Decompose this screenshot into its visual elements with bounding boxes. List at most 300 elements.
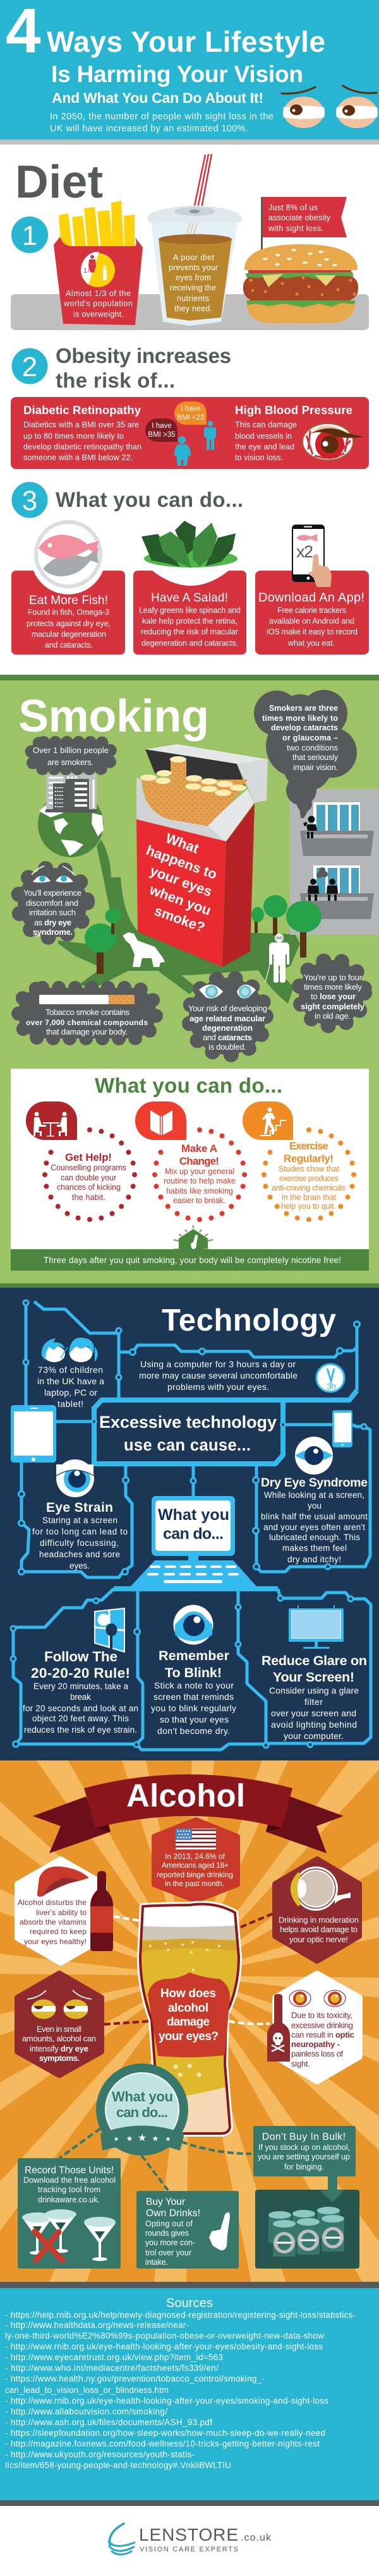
screen	[152, 1496, 235, 1556]
icon: city buildings	[45, 774, 97, 812]
icon: thumbs up hand	[209, 2212, 230, 2250]
banner: Three days after you quit smoking, your body will be completely nicotine free!	[44, 1255, 341, 1265]
hexagon: optic nerve: helps avoid damage to	[280, 1925, 358, 1934]
text: habits like smoking	[166, 1187, 233, 1196]
text	[164, 1143, 236, 1205]
card text: Leafy greens like spinach and	[139, 606, 241, 615]
icon: bloodshot eye	[303, 424, 364, 460]
cigarettes	[140, 756, 248, 827]
hexagon: toxicity: painless loss of	[291, 2049, 343, 2058]
fries	[59, 201, 135, 249]
callout	[253, 2126, 356, 2202]
text: Exercise	[289, 1140, 328, 1152]
tray	[11, 294, 369, 330]
computer use text	[139, 1359, 298, 1392]
icon: grey fish	[43, 547, 99, 576]
20-20-20 rule: for 20 seconds and look at an	[23, 1704, 138, 1713]
card text: Eat More Fish!	[29, 594, 108, 607]
card: record those units: drinkaware.co.uk.	[38, 2195, 100, 2204]
smoke cloud: dry eye: You'll experience	[23, 888, 81, 898]
cup	[151, 221, 238, 326]
source list: - http://www.who.int/mediacentre/factsheets/fs339/en/	[5, 2363, 219, 2373]
heading: obesity	[56, 344, 231, 392]
smoke cloud: lose your sight	[299, 960, 365, 1026]
eye strain: headaches and sore	[39, 1550, 120, 1559]
callout: If you stock up on alcohol,	[258, 2143, 350, 2152]
panel: smoking what you can do	[11, 1069, 369, 1271]
drink	[159, 234, 232, 321]
flag callout: with sight loss.	[268, 224, 323, 233]
fries text: world's population	[63, 299, 133, 308]
card	[255, 571, 369, 655]
card text: protects against dry eye,	[27, 619, 111, 628]
hexagon: toxicity: can result in optic	[291, 2030, 354, 2039]
card text: available on Android and	[269, 617, 354, 626]
pack question text: when you	[147, 882, 214, 918]
callout: for binging.	[284, 2163, 324, 2171]
speech bubble: BMI under 22: I have	[181, 405, 201, 413]
source list: - http://www.allaboutvision.com/smoking/	[5, 2407, 167, 2416]
text: Regularly!	[284, 1153, 334, 1165]
hexagon: dry eye symptoms: symptoms.	[39, 2053, 80, 2063]
bun bottom	[246, 303, 356, 323]
computer use text: more may cause several uncomfortable	[139, 1370, 298, 1380]
icon: hand	[308, 554, 332, 587]
smoke cloud: three times more likely: that seriously	[292, 753, 339, 762]
badge 3	[11, 482, 48, 518]
text: in the brain that	[282, 1193, 337, 1202]
eye strain: Eye Strain	[46, 1500, 113, 1515]
icon: children	[42, 1338, 97, 1362]
icon: six-pack of cans	[268, 2207, 344, 2257]
smoke cloud: three times more likely	[254, 690, 357, 818]
dry eye syndrome	[261, 1437, 368, 1564]
dry eye syndrome: lubricated enough. This	[269, 1533, 360, 1542]
panel: alcohol background	[0, 1760, 379, 2282]
ribbon banner: Alcohol	[33, 1774, 344, 1853]
card: record those units: Download the free alcohol	[23, 2176, 116, 2185]
smoke cloud: 7000 chemical compounds	[18, 988, 156, 1038]
high blood pressure: the eye and lead	[235, 442, 294, 451]
heading: Smoking: Smoking	[18, 691, 209, 742]
diabetic retinopathy: Diabetic Retinopathy	[23, 403, 141, 417]
card: record those units: tracking tool from	[38, 2185, 100, 2194]
card: buy your own drinks: Opting out of	[145, 2219, 193, 2228]
remember to blink: you to blink regularly	[151, 1703, 236, 1713]
hexagon: dry eye symptoms: amounts, alcohol can	[22, 2034, 96, 2043]
hexagon: US binge drinking statistic: Americans aged 18+	[162, 1861, 229, 1870]
hexagon: US binge drinking statistic	[155, 1820, 237, 1900]
pack question text: happens to	[144, 842, 219, 882]
excessive technology heading: use can cause...	[124, 1437, 251, 1454]
icon: clouded eyes	[199, 985, 256, 999]
diabetic retinopathy: develop diabetic retinopathy than	[23, 442, 141, 451]
badge 2	[11, 348, 48, 384]
speech bubble: BMI over 35: BMI >35	[148, 431, 176, 439]
smoke cloud: lose your sight: You're up to four	[304, 973, 363, 982]
stars: ★	[114, 2136, 119, 2143]
stars	[114, 2133, 171, 2144]
smoke cloud: dry eye: syndrome.	[33, 927, 73, 937]
title: And What You Can Do About It!	[52, 90, 263, 106]
diabetic retinopathy: someone with a BMI below 22.	[23, 453, 133, 462]
smoke cloud: three times more likely: times more likely to	[262, 714, 338, 723]
fries text: is overweight.	[73, 310, 124, 319]
drink text: prevents your	[169, 263, 218, 272]
wordmark	[139, 2525, 272, 2553]
dotted ring	[155, 1130, 244, 1220]
trees	[85, 895, 322, 974]
card text: iOS make it easy to record	[267, 627, 358, 636]
drink text: receiving the	[170, 283, 216, 292]
make a change	[135, 1101, 244, 1220]
lettuce and tomato	[246, 270, 356, 307]
card: record those units: Record Those Units!	[25, 2165, 114, 2176]
icon: strained eye	[56, 1459, 94, 1497]
smoke cloud: macular degeneration: is doubled.	[208, 1042, 246, 1052]
exercise regularly	[243, 1101, 354, 1220]
icon: poison bottle	[267, 1994, 290, 2062]
icon: swirl	[109, 2524, 135, 2555]
hexagon: US binge drinking statistic: in the past month.	[165, 1879, 224, 1888]
icon: stairs	[243, 1101, 293, 1140]
ground and smoke stream	[58, 840, 300, 1004]
smoke cloud: lose your sight: to lose your	[311, 992, 356, 1001]
wordmark: .co.uk	[241, 2532, 272, 2543]
drink text: A poor diet	[173, 253, 215, 262]
smoke cloud: three times more likely: develop cataracts	[271, 723, 338, 732]
source list: - http://www.rnib.org.uk/eye-health-looking-after-your-eyes/smoking-and-sight-loss	[5, 2396, 328, 2406]
smoke cloud: three times more likely: Smokers are three	[269, 704, 338, 713]
icon: house with hand	[174, 1225, 213, 1249]
dark box	[255, 2190, 359, 2269]
20-20-20 rule: Every 20 minutes, take a	[33, 1682, 128, 1691]
icon: tablet	[11, 1405, 56, 1463]
stars: ★	[126, 2134, 133, 2143]
pack side	[222, 804, 255, 967]
speech bubble: BMI over 35: I have	[152, 422, 172, 430]
computer use text: problems with your eyes.	[167, 1382, 269, 1392]
fries text	[63, 289, 133, 319]
source list: can_lead_to_vision_loss_or_blindness.htm	[5, 2385, 169, 2395]
smoke cloud: lose your sight: sight completely	[301, 1002, 365, 1011]
remember to blink: Remember	[159, 1648, 230, 1663]
card	[133, 571, 246, 655]
title: Ways Your Lifestyle	[47, 25, 325, 58]
hexagon: liver: required to keep	[30, 1927, 87, 1936]
dotted ring	[45, 1130, 135, 1220]
dry eye syndrome: blink half the usual amount	[261, 1512, 368, 1521]
stars: ★	[138, 2133, 147, 2144]
hexagon: liver: absorb the vitamins	[20, 1918, 87, 1926]
smoke cloud: macular degeneration	[188, 978, 267, 1055]
plate	[34, 520, 102, 588]
flag callout: Just 8% of us	[268, 203, 318, 212]
card text: Have A Salad!	[151, 591, 228, 605]
badge 3: 3	[22, 485, 37, 516]
speech bubble: BMI under 22	[174, 401, 207, 425]
callout: Don't Buy In Bulk!	[262, 2132, 346, 2142]
card: record those units	[18, 2158, 121, 2269]
intro text	[50, 112, 274, 134]
hexagon: liver: liver's ability to	[36, 1908, 87, 1917]
hexagon: toxicity: excessive drinking	[291, 2021, 353, 2030]
ribbon tails	[33, 1796, 344, 1853]
icon: eye cross section	[292, 1867, 351, 1911]
hexagon: liver	[18, 1860, 104, 1962]
callout: you are setting yourself up	[258, 2152, 350, 2161]
pack question text: your eyes	[148, 863, 214, 899]
keyboard	[131, 1556, 256, 1586]
bun top	[244, 244, 358, 270]
children statistic: 73% of children	[38, 1365, 103, 1375]
lid	[145, 744, 268, 803]
pack lip	[136, 778, 254, 841]
balcony lower	[300, 893, 374, 919]
glass outline	[140, 1904, 239, 2134]
20-20-20 rule: object 20 feet away. This	[32, 1714, 129, 1723]
badge 1	[11, 217, 48, 253]
intro text: In 2050, the number of people with sight loss in the	[50, 112, 274, 122]
panel: fries	[54, 201, 143, 325]
high blood pressure: High Blood Pressure	[235, 403, 352, 417]
20-20-20 rule	[23, 1608, 138, 1735]
icon: tired yellow eyes	[27, 1990, 92, 2019]
text: Change!	[179, 1155, 219, 1167]
text: exercise produces	[279, 1174, 339, 1183]
icon: two smokers	[308, 879, 338, 901]
icon: dry eye	[295, 1437, 333, 1475]
heading: What you can do...	[95, 1074, 282, 1097]
smoke cloud: macular degeneration: degeneration	[202, 1023, 253, 1033]
eye strain: eyes.	[69, 1561, 90, 1570]
badge ribbon	[100, 2126, 184, 2153]
20-20-20 rule: break	[70, 1692, 91, 1702]
panel: download an app	[255, 525, 369, 655]
straw	[184, 153, 213, 243]
dotted ring	[264, 1130, 354, 1220]
glass outer	[140, 1904, 239, 2134]
icon: tired eyes	[282, 86, 378, 128]
card text: Download An App!	[258, 591, 364, 605]
children statistic: tablet!	[57, 1399, 83, 1409]
source list: tics/item/658-young-people-and-technology#.VnkliBWLTIU	[5, 2460, 231, 2470]
flag pole	[261, 197, 263, 250]
high blood pressure: to vision loss.	[235, 453, 283, 462]
smoke cloud: macular degeneration: and cataracts	[203, 1033, 252, 1042]
reduce glare: filter	[304, 1697, 323, 1707]
icon: globe	[38, 792, 104, 857]
card text	[139, 591, 241, 648]
beer layers	[141, 1925, 238, 2132]
hexagon: liver: Alcohol disturbs the	[18, 1898, 87, 1907]
building with balconies	[290, 789, 379, 935]
hexagon: dry eye symptoms: Even in small	[37, 2024, 81, 2034]
card: buy your own drinks	[136, 2191, 239, 2269]
flag callout	[263, 197, 347, 237]
hexagon: liver: your eyes healthy!	[24, 1937, 87, 1946]
source list: - http://www.rnib.org.uk/eye-health-looking-after-your-eyes/obesity-and-sight-loss	[5, 2342, 323, 2351]
source list: - http://www.ukyouth.org/resources/youth-statis-	[5, 2450, 195, 2459]
lettuce top and cheese	[246, 272, 354, 287]
card text: degeneration and cataracts.	[141, 639, 238, 648]
small smoke	[316, 867, 328, 878]
text: Get Help!	[65, 1151, 112, 1163]
dry eye syndrome: dry and itchy!	[287, 1555, 341, 1564]
20-20-20 rule: Follow The	[44, 1649, 117, 1665]
smoke cloud: lose your sight: in old age.	[315, 1011, 351, 1021]
icon: book	[135, 1101, 186, 1140]
smoke cloud: lose your sight: times more likely	[304, 982, 363, 992]
icon: cocktail glasses	[22, 2209, 116, 2261]
card text: what you eat.	[287, 639, 335, 648]
pie chart: one third overweight: 1/3	[83, 267, 94, 275]
heading: what you can do: What you can do...	[56, 488, 243, 511]
hexagon: dry eye symptoms	[18, 1974, 101, 2075]
reduce glare: Your Screen!	[273, 1670, 354, 1685]
reduce glare: Consider using a glare	[269, 1685, 359, 1695]
icon: US flag	[176, 1829, 216, 1849]
icon: cigarette	[39, 995, 135, 1004]
icon: overweight person	[174, 436, 191, 466]
logo: Lenstore	[109, 2524, 272, 2555]
beer question label: How does	[160, 1987, 216, 2000]
smoke cloud: macular degeneration: age related macular	[190, 1014, 265, 1023]
icon: dog	[123, 932, 165, 967]
patty	[243, 275, 358, 300]
banner	[11, 1249, 369, 1271]
text: chances of kicking	[57, 1183, 121, 1192]
icon: irritated eyes	[32, 866, 75, 882]
source list: - http://www.ash.org.uk/files/documents/ASH_93.pdf	[5, 2418, 212, 2427]
20-20-20 rule: reduces the risk of eye strain.	[24, 1725, 137, 1735]
pack question text: smoke?	[152, 903, 207, 935]
excessive technology heading	[99, 1413, 277, 1454]
title: Is Harming Your Vision	[51, 61, 303, 87]
panel: burger	[243, 197, 358, 323]
card: buy your own drinks: you more con-	[145, 2238, 195, 2247]
panel: technology background	[0, 1288, 379, 1760]
heading: Technology: Technology	[162, 1303, 336, 1338]
remember to blink: don't become dry.	[157, 1726, 230, 1736]
beer question label: alcohol	[168, 2002, 208, 2015]
drink text: eyes from	[176, 273, 211, 282]
screen: can do...	[163, 1525, 224, 1543]
text: the habit.	[72, 1193, 105, 1202]
icon: liver	[37, 1867, 89, 1897]
icon: smoker	[303, 816, 317, 838]
smoke cloud: dry eye: irritation such	[29, 908, 76, 917]
text: Make A	[181, 1143, 217, 1154]
card: buy your own drinks: trol over your	[145, 2248, 191, 2257]
drink text: nutrients	[177, 294, 209, 303]
fries text: Almost 1/3 of the	[66, 289, 131, 298]
fries box	[54, 237, 143, 325]
drink text: they need.	[174, 304, 212, 313]
icon: red cross	[35, 2231, 63, 2260]
wordmark: VISION CARE EXPERTS	[140, 2546, 238, 2553]
text: routine to help make	[164, 1177, 236, 1185]
remember to blink: Stick a note to your	[154, 1680, 234, 1690]
remember to blink	[151, 1605, 236, 1736]
smoke cloud: macular degeneration: Your risk of developing	[188, 1004, 267, 1013]
source list: - https://sleepfoundation.org/how-sleep-works/how-much-sleep-do-we-really-need	[5, 2428, 325, 2438]
icon: phone	[332, 1410, 352, 1447]
text	[51, 1151, 126, 1202]
beer question label	[148, 1973, 230, 2057]
eye strain: Staring at a screen	[42, 1516, 117, 1525]
icon: laptop what you can do	[131, 1496, 256, 1586]
smoke cloud: dry eye: discomfort and	[26, 898, 78, 908]
card: buy your own drinks: intake.	[145, 2258, 168, 2267]
hexagon: US binge drinking statistic: reported binge drinking	[157, 1870, 233, 1879]
children statistic	[37, 1365, 104, 1409]
badge text: can do...	[116, 2104, 168, 2120]
panel: soft drink	[148, 153, 242, 326]
card	[11, 571, 125, 655]
hexagon: optic nerve	[275, 1860, 359, 1961]
remember to blink: To Blink!	[165, 1665, 222, 1680]
balcony upper	[300, 831, 374, 856]
speech bubble: BMI over 35	[145, 418, 177, 442]
hexagon: toxicity: sight.	[291, 2059, 310, 2069]
smoke cloud: three times more likely: or glaucoma –	[282, 733, 338, 742]
smoke cloud: 7000 chemical compounds: over 7,000 chemical compounds	[26, 1018, 148, 1027]
intro text: UK will have increased by an estimated 100%.	[50, 124, 248, 134]
source list: - https://help.rnib.org.uk/help/newly-diagnosed-registration/registering-sight-loss/statistics-	[5, 2310, 356, 2320]
children statistic: laptop, PC or	[44, 1387, 97, 1398]
pack question text	[144, 830, 219, 935]
text: can double your	[61, 1173, 116, 1182]
window upper	[313, 802, 360, 834]
heading: Alcohol	[126, 1778, 245, 1813]
beer question label: your eyes?	[159, 2030, 219, 2043]
text	[272, 1140, 346, 1211]
wordmark: LENSTORE	[139, 2525, 238, 2544]
title	[47, 25, 325, 106]
dashed connectors	[59, 1914, 272, 2190]
panel: risks	[11, 397, 369, 469]
badge 1: 1	[22, 220, 37, 251]
icon: open eye	[173, 1605, 214, 1645]
source list: ly-one-third-world%E2%80%99s-population-obese-or-overweight-new-data-show	[5, 2331, 324, 2341]
panel: smoking background	[0, 675, 379, 1288]
children statistic: in the UK have a	[37, 1376, 104, 1386]
card: don't buy in bulk	[253, 2126, 359, 2269]
dry eye syndrome: makes them feel	[282, 1543, 347, 1553]
smoke cloud: 1 billion smokers: are smokers.	[47, 757, 93, 767]
high blood pressure: This can damage	[235, 420, 297, 429]
high blood pressure: blood vessels in	[235, 432, 292, 441]
source list: - http://magazine.foxnews.com/food-wellness/10-tricks-getting-better-nights-rest	[5, 2439, 320, 2448]
icon: window	[95, 1608, 124, 1652]
phone: x2	[296, 542, 313, 561]
icon: blind person with cane	[265, 934, 289, 983]
pack question text: What	[164, 830, 202, 857]
bowl of leaves	[141, 521, 238, 568]
cigarette pack	[136, 744, 268, 967]
icon: bloodshot yellow eyes	[289, 1990, 346, 2007]
drink text	[169, 253, 218, 313]
computer use text: Using a computer for 3 hours a day or	[140, 1359, 296, 1369]
hexagon: dry eye symptoms: intensify dry eye	[30, 2044, 88, 2053]
circuit lines	[13, 1302, 371, 1750]
hexagon: US binge drinking statistic: In 2013, 24.6% of	[165, 1852, 226, 1861]
source list: - http://www.eyecaretrust.org.uk/view.php?item_id=563	[5, 2353, 223, 2362]
window lower	[313, 865, 360, 897]
badge text	[112, 2089, 173, 2120]
smoke cloud: 1 billion smokers: Over 1 billion people	[33, 745, 109, 755]
